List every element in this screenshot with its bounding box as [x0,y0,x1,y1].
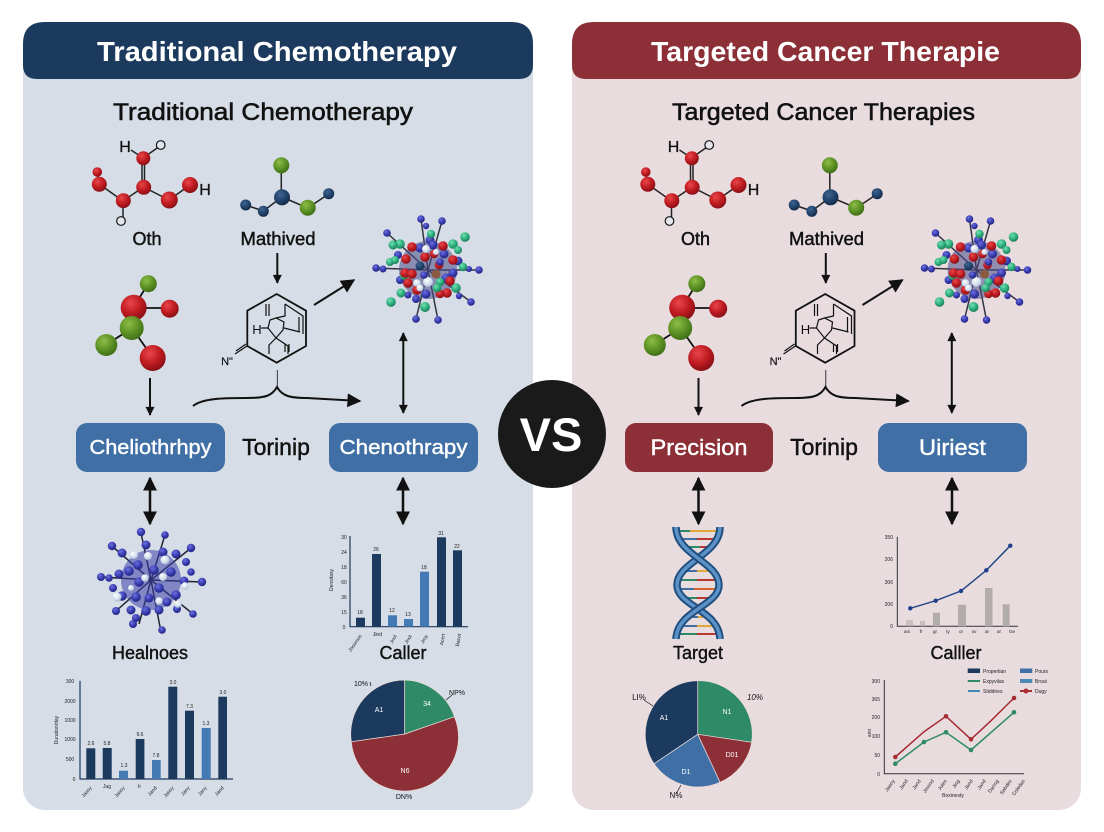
line and bar chart: upper: 0 [890,624,893,630]
header: traditional chemotherapy: Traditional Chemotherapy [97,36,457,67]
line chart: lower: Jand [964,779,975,791]
bar chart: upper: 18 [357,610,363,616]
bar chart: upper: Jnot [404,633,414,645]
bar chart: upper: 31 [438,531,444,537]
label: Target: Target [673,643,723,663]
bar chart: upper: 22 [454,544,460,550]
line and bar chart: upper: 350 [885,535,893,541]
line chart: lower: Sabdes [999,778,1014,796]
bar chart: upper: 60 [341,580,347,586]
molecule: red chain [640,139,759,225]
bar chart: lower: 7.8 [153,753,160,759]
bar chart: upper: Bacot [455,633,463,647]
nanoparticle: multicolour [372,215,483,324]
bar chart: upper: 15 [341,610,347,616]
line and bar chart: upper: ar [985,629,989,634]
line chart: lower [867,679,1027,799]
bar chart: lower: 3.0 [170,680,177,686]
bar chart: upper [329,531,468,653]
label: Calller: Calller [930,643,982,663]
bar chart: lower: Jany [197,785,209,797]
chart legend: Dugy [1035,689,1047,695]
bar chart: lower: Ir [138,784,141,790]
bar chart: upper: 24 [341,550,347,556]
pie chart: left panel: NP% [449,690,465,697]
arrow: particle double [402,333,404,413]
arrow: branching connector [742,370,908,406]
icon: DNA helix [676,527,720,639]
line chart: lower: Jand [912,779,923,791]
bar chart: upper: 13 [405,612,411,618]
subheading: Targeted Cancer Therapies [672,99,975,126]
bar chart: lower: 1000 [64,718,76,724]
pie chart: right panel: A1 [660,715,668,722]
pie chart: right panel: D1 [682,769,691,776]
line chart: lower: Jaeny [884,778,897,793]
badge: VS: VS [520,408,582,461]
chart legend [968,668,1049,695]
pie chart: left panel [351,680,465,801]
line chart: lower: Jand [899,779,910,791]
bar chart: lower: Jand [214,785,226,798]
pie chart: right panel: N% [670,791,682,800]
line and bar chart: upper: 206 [885,602,893,608]
arrow: particle double [951,333,953,413]
panel: traditional chemotherapy [23,22,533,810]
label: Caller: Caller [379,643,427,663]
line chart: lower: Boxinesty [942,793,964,799]
arrow: left double [149,478,151,524]
arrow: molecule down [698,378,700,415]
line and bar chart: upper: 306 [885,580,893,586]
structure: hexagonal ring [221,294,306,368]
line chart: lower: 0 [877,772,880,778]
bar chart: lower: Duration/day [54,715,60,744]
bar chart: upper: Jnol [389,634,399,645]
bar chart: upper: 18 [421,565,427,571]
pie chart: left panel: A1 [375,707,383,714]
header: targeted cancer therapie [572,22,1081,79]
line chart: lower: Jand [977,779,988,791]
bar chart: lower: 0 [73,777,76,783]
line and bar chart: upper [885,535,1018,634]
arrow: right double [402,478,404,524]
pie chart: right panel: N1 [723,709,732,716]
bar chart: upper: 36 [341,595,347,601]
line chart: lower: 200 [872,715,880,721]
bar chart: lower: 300 [66,679,74,685]
bar chart: upper: 30 [341,535,347,541]
bar chart: lower: 1000 [64,737,76,743]
molecule: navy and green [240,157,334,217]
bar chart: lower: 2.6 [88,741,95,747]
arrow: left double [697,478,700,524]
line and bar chart: upper: ov [972,629,977,634]
molecule: red and green cluster [95,275,179,371]
bar chart: upper: Jind [373,632,382,638]
arrow: branching connector [193,370,360,406]
line and bar chart: upper: gr [933,629,937,634]
line and bar chart: upper: fr [920,629,923,634]
chart legend: Stiddnes [983,689,1003,695]
line and bar chart: upper: Ge [1009,629,1015,634]
panel: targeted cancer therapies [572,22,1081,810]
line and bar chart: upper: ar [997,629,1001,634]
line and bar chart: upper: or [959,629,963,634]
line chart: lower: Coledas [1011,778,1027,797]
button: Cheliothrhpy: Cheliothrhpy [90,437,212,459]
arrow: molecule down [149,378,151,415]
bar chart: lower: 5.8 [104,741,111,747]
button: Uiriest [878,423,1027,472]
bar chart: upper: 18 [341,565,347,571]
button: Uiriest: Uiriest [919,435,986,460]
line chart: lower: 300 [872,679,880,685]
arrow: ring to particle [862,280,902,305]
bar chart: lower: Jand [147,785,159,798]
badge: VS [498,380,606,488]
pie chart: right panel [632,681,763,800]
bar chart: upper: Jmy [420,634,430,645]
bar chart: lower: Jug [103,784,111,790]
pie chart: left panel: N6 [401,768,410,775]
arrow: ring to particle [314,280,354,305]
chart legend: Pours [1035,669,1049,675]
line chart: lower: 50 [874,753,880,759]
bar chart: lower: Jassy [163,785,176,799]
bar chart: lower [54,679,233,799]
arrow: right double [951,478,953,524]
line chart: lower: Darmg [987,779,1001,794]
bar chart: lower: Jassy [81,785,94,799]
pie chart: left panel: DN% [396,794,412,801]
bar chart: lower: 3.0 [220,690,227,696]
bar chart: lower: 500 [66,757,74,763]
molecule: navy and green [789,157,883,217]
structure: hexagonal ring [770,294,854,368]
subheading: Traditional Chemotherapy [113,99,413,126]
button: Chenothrapy [329,423,478,472]
label: Oth: Oth [681,229,710,249]
label: Oth: Oth [132,229,162,249]
label: Torinip: Torinip [790,434,858,460]
button: Precision: Precision [650,435,748,460]
bar chart: lower: 1.3 [121,763,128,769]
chart legend: Brout [1035,679,1048,685]
button: Cheliothrhpy [76,423,225,472]
button: Chenothrapy: Chenothrapy [340,437,468,459]
bar chart: lower: 9.6 [137,732,144,738]
bar chart: lower: Jany [180,785,192,797]
pie chart: right panel: LI% [632,693,646,702]
button: Precision [625,423,773,472]
line and bar chart: upper: ani [904,629,910,634]
bar chart: upper: 12 [389,608,395,614]
bar chart: upper: Jossmos [347,633,364,653]
pie chart: right panel: D01 [726,752,739,759]
label: Mathived: Mathived [240,228,316,249]
bar chart: lower: Jassy [114,785,127,799]
header: targeted cancer therapie: Targeted Cancer Therapie [651,36,1000,67]
bar chart: upper: 0 [343,625,346,631]
nanoparticle: blue [97,528,206,634]
chart legend: Propertian [983,669,1006,675]
line chart: lower: 365 [872,697,880,703]
line chart: lower: ann [867,729,873,737]
pie chart: left panel: 10% [354,681,368,688]
nanoparticle: multicolour [921,215,1031,324]
bar chart: lower: 2000 [64,699,76,705]
pie chart: right panel: 10% [747,693,763,702]
bar chart: upper: Acert [439,633,447,646]
molecule: red chain [92,139,211,225]
molecule: red and green cluster [644,275,727,371]
line and bar chart: upper: ty [946,629,950,634]
bar chart: lower: 7.3 [186,704,193,710]
arrow: Mathived to ring [825,253,827,283]
line chart: lower: 100 [872,734,880,740]
bar chart: upper: 26 [373,547,379,553]
label: Healnoes: Healnoes [112,643,188,663]
line chart: lower: Jmond [922,779,936,794]
label: Mathived: Mathived [789,228,864,249]
bar chart: upper: Densitasy [329,569,335,591]
chart legend: Expyvilas [983,679,1005,685]
bar chart: lower: 1.3 [203,721,210,727]
line chart: lower: Jing [951,779,962,790]
header: traditional chemotherapy [23,22,533,79]
pie chart: left panel: 34 [423,701,431,708]
arrow: Mathived to ring [276,253,278,283]
line and bar chart: upper: 206 [885,557,893,563]
line chart: lower: Jules [937,778,949,792]
label: Torinip: Torinip [242,434,310,460]
